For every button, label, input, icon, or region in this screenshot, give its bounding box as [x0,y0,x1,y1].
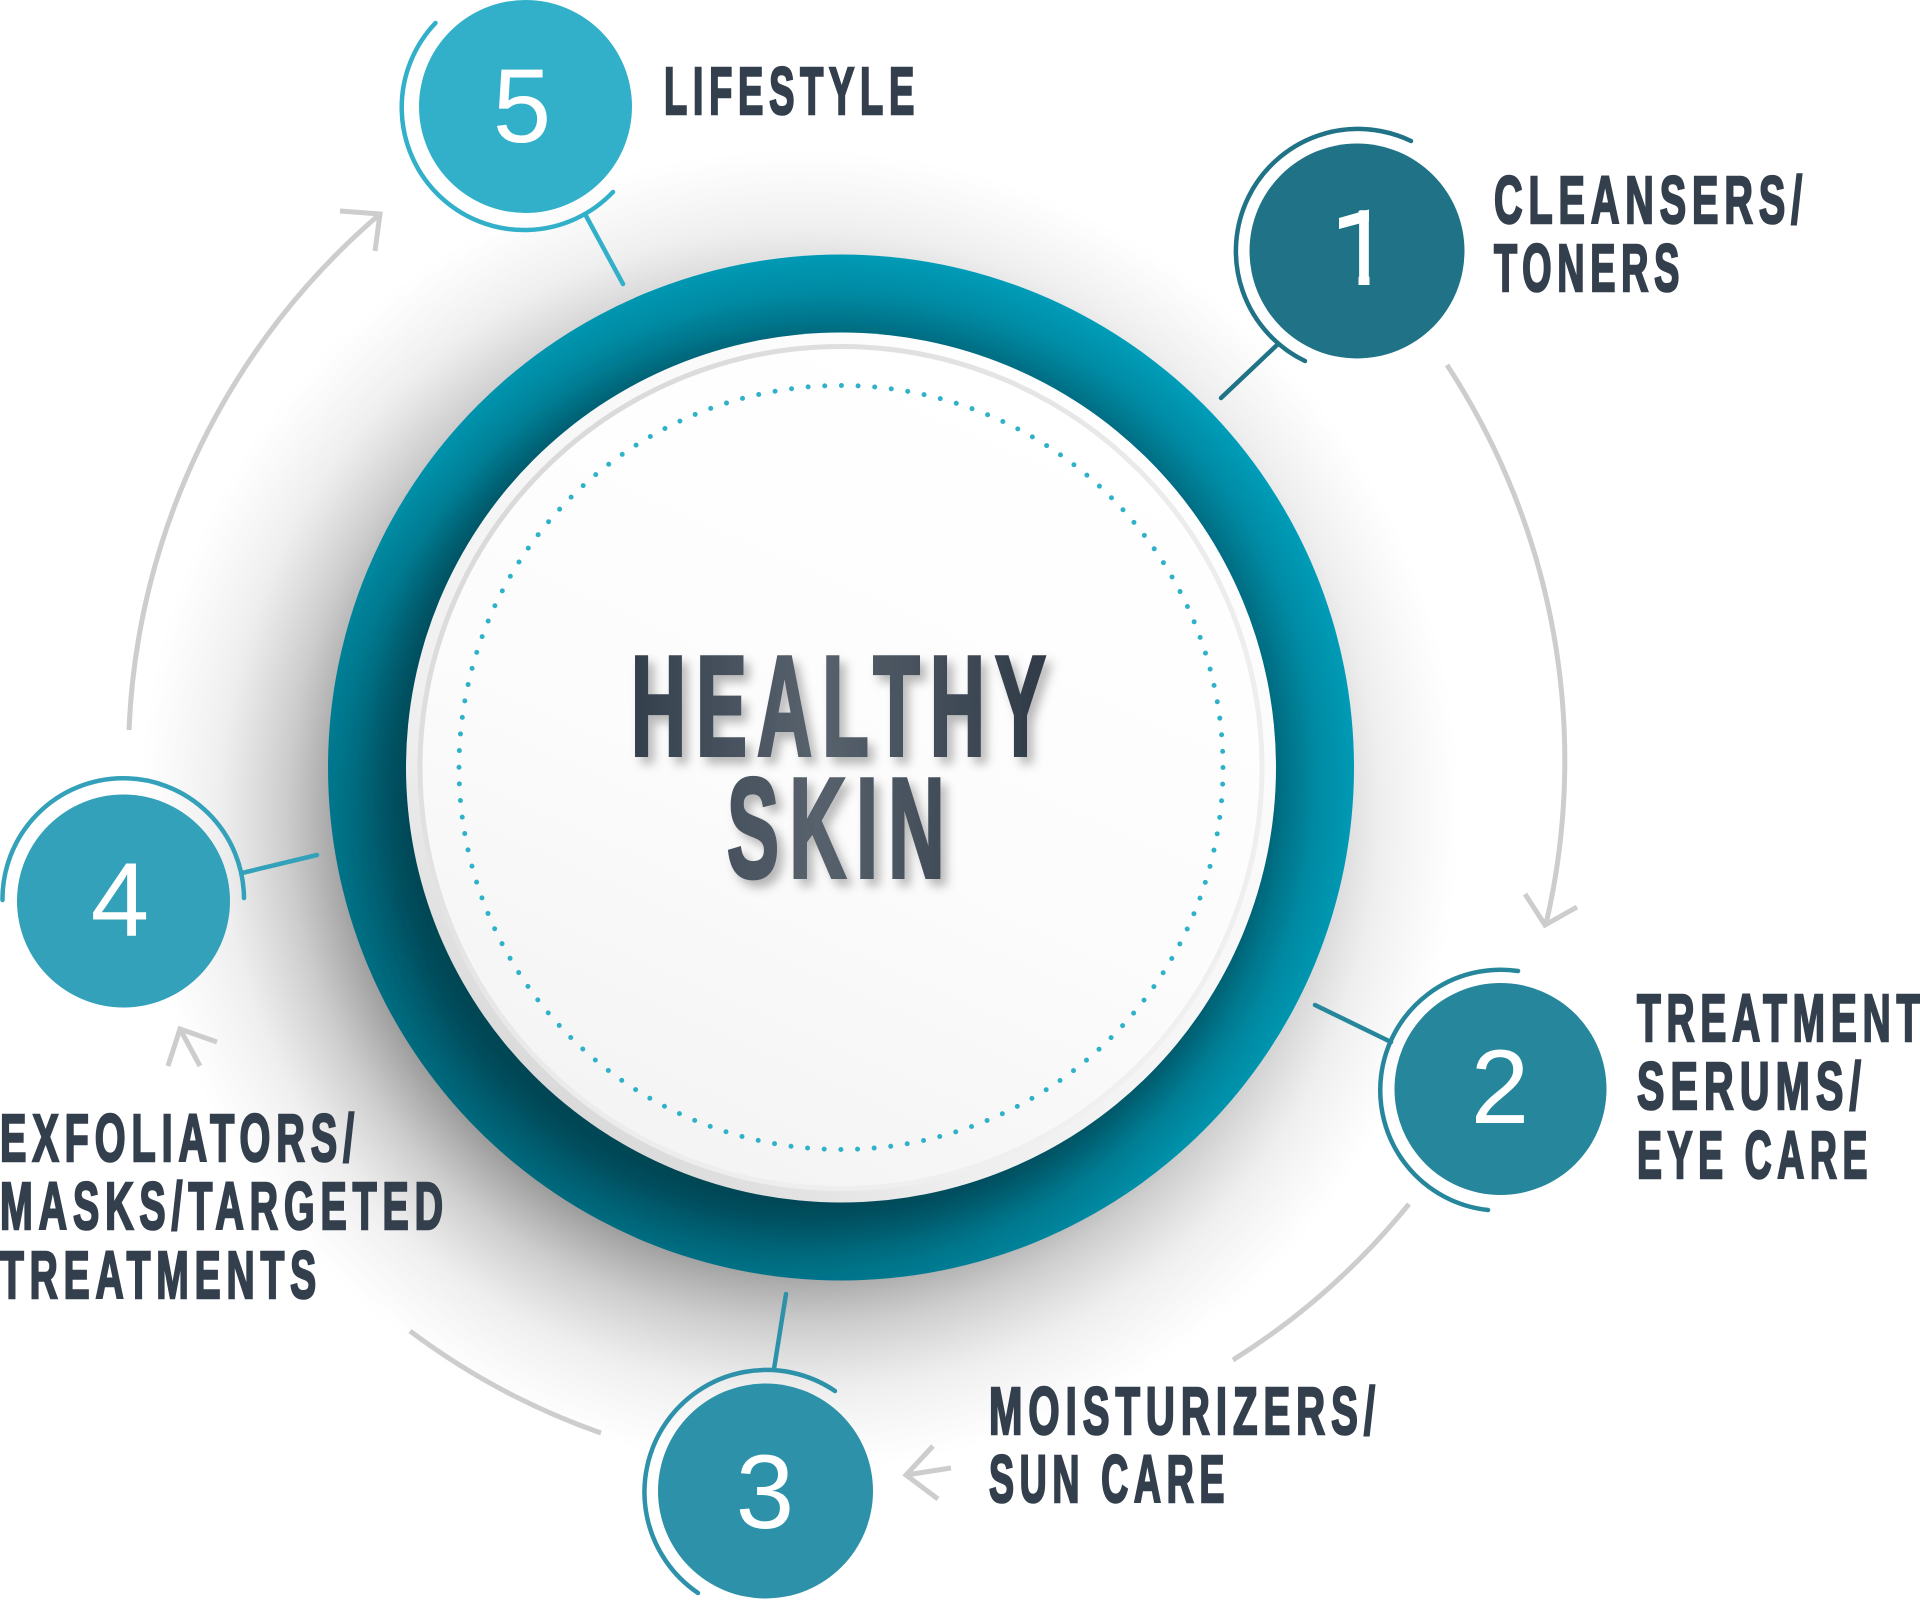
title: healthy skin: SKIN [727,749,955,908]
number 4: 4 [91,842,149,959]
label 4: MASKS/TARGETED [0,1169,449,1244]
outline arc 4 [2,778,244,900]
circle 4 [17,794,230,1008]
label 3 [989,1374,1381,1517]
arrow: step 4 to 5 [129,211,380,730]
outline arc 3 [644,1370,835,1593]
title: healthy skin: HEALTHY [631,627,1056,786]
step 1 [1221,129,1808,398]
label 3: MOISTURIZERS/ [989,1374,1381,1449]
number 2: 2 [1471,1029,1529,1146]
outline arc 2 [1380,970,1518,1210]
circle 5 [419,0,632,213]
arrow: step 3 to 4 [168,1029,601,1433]
label 1: TONERS [1494,231,1685,306]
central white disc [406,332,1276,1202]
outline arc 1 [1236,129,1411,361]
label 4 [0,1101,449,1313]
drop shadow behind main ring [140,150,1460,1470]
number 1: 1 [1332,187,1392,309]
label 4: TREATMENTS [0,1238,322,1313]
connector 1 [1221,345,1277,398]
label 1 [1494,163,1808,306]
label 4: EXFOLIATORS/ [0,1101,360,1176]
step 4 [0,778,449,1313]
dotted inner circle [459,386,1223,1150]
label 3: SUN CARE [989,1442,1230,1517]
number 1 [1339,210,1370,285]
circle 1 [1250,144,1464,358]
connector 4 [242,855,317,873]
step 5 [402,0,920,284]
title: healthy skin [631,627,1056,908]
number 3: 3 [736,1434,794,1551]
outline arc 5 [402,23,613,230]
connector 5 [585,214,623,284]
label 5: LIFESTYLE [664,54,920,129]
main teal ring [328,254,1354,1280]
arrow: step 2 to 3 [906,1204,1409,1499]
label 2 [1637,981,1920,1193]
arrow: step 1 to 2 [1447,365,1577,925]
number 5: 5 [493,48,551,165]
connector 2 [1315,1005,1391,1042]
circle 3 [658,1384,873,1598]
connector 3 [774,1294,786,1369]
circle 2 [1394,983,1606,1195]
step 3 [644,1294,1381,1598]
step 2 [1315,970,1920,1210]
